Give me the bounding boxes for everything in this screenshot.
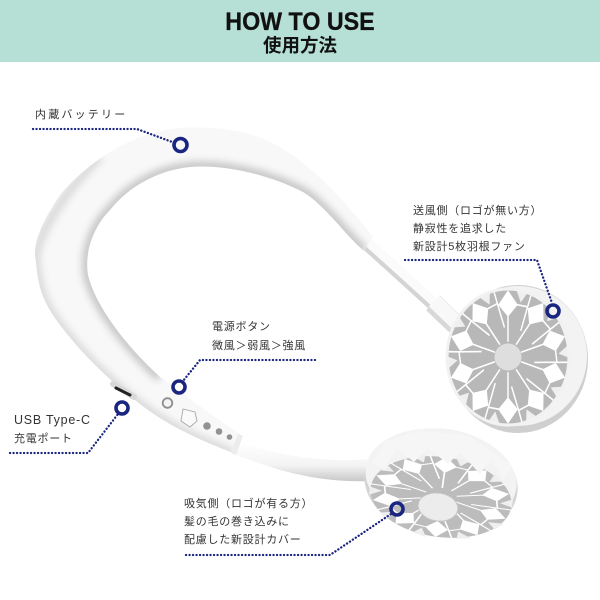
label: blower side: 静寂性を追求した — [413, 223, 507, 235]
callout markers — [116, 138, 559, 515]
label: blower side — [413, 204, 542, 253]
subtitle: 使用方法 — [263, 35, 337, 56]
intake logo — [416, 490, 460, 524]
USB port — [113, 384, 134, 397]
label: power button: 電源ボタン — [212, 321, 271, 333]
leader lines — [10, 129, 552, 555]
label: USB — [14, 413, 91, 445]
product illustration: neck fan — [8, 128, 588, 556]
label: power button: 微風＞弱風＞強風 — [212, 340, 306, 352]
label: USB: 充電ポート — [14, 433, 73, 445]
indicator lights — [203, 422, 232, 440]
label: USB: USB Type-C — [14, 413, 91, 427]
logo badge — [181, 409, 197, 427]
label: blower side: 送風側（ロゴが無い方） — [413, 205, 542, 217]
label: intake side: 髪の毛の巻き込みに — [184, 516, 290, 528]
label: intake side: 吸気側（ロゴが有る方） — [184, 498, 313, 510]
label: power button — [212, 320, 306, 352]
fan: intake side — [357, 419, 525, 550]
title: HOW TO USE — [225, 8, 375, 36]
right arm tube — [368, 243, 457, 325]
fan: exhaust side — [442, 285, 588, 433]
label: blower side: 新設計5枚羽根ファン — [413, 241, 526, 253]
lower arm tube — [231, 434, 372, 481]
label: intake side: 配慮した新設計カバー — [184, 534, 302, 546]
label: intake side — [184, 498, 313, 546]
power button — [163, 398, 172, 408]
header banner — [0, 0, 600, 62]
label: battery: 内蔵バッテリー — [35, 109, 127, 121]
intake rim triangles — [372, 430, 512, 480]
neck band — [35, 128, 373, 453]
